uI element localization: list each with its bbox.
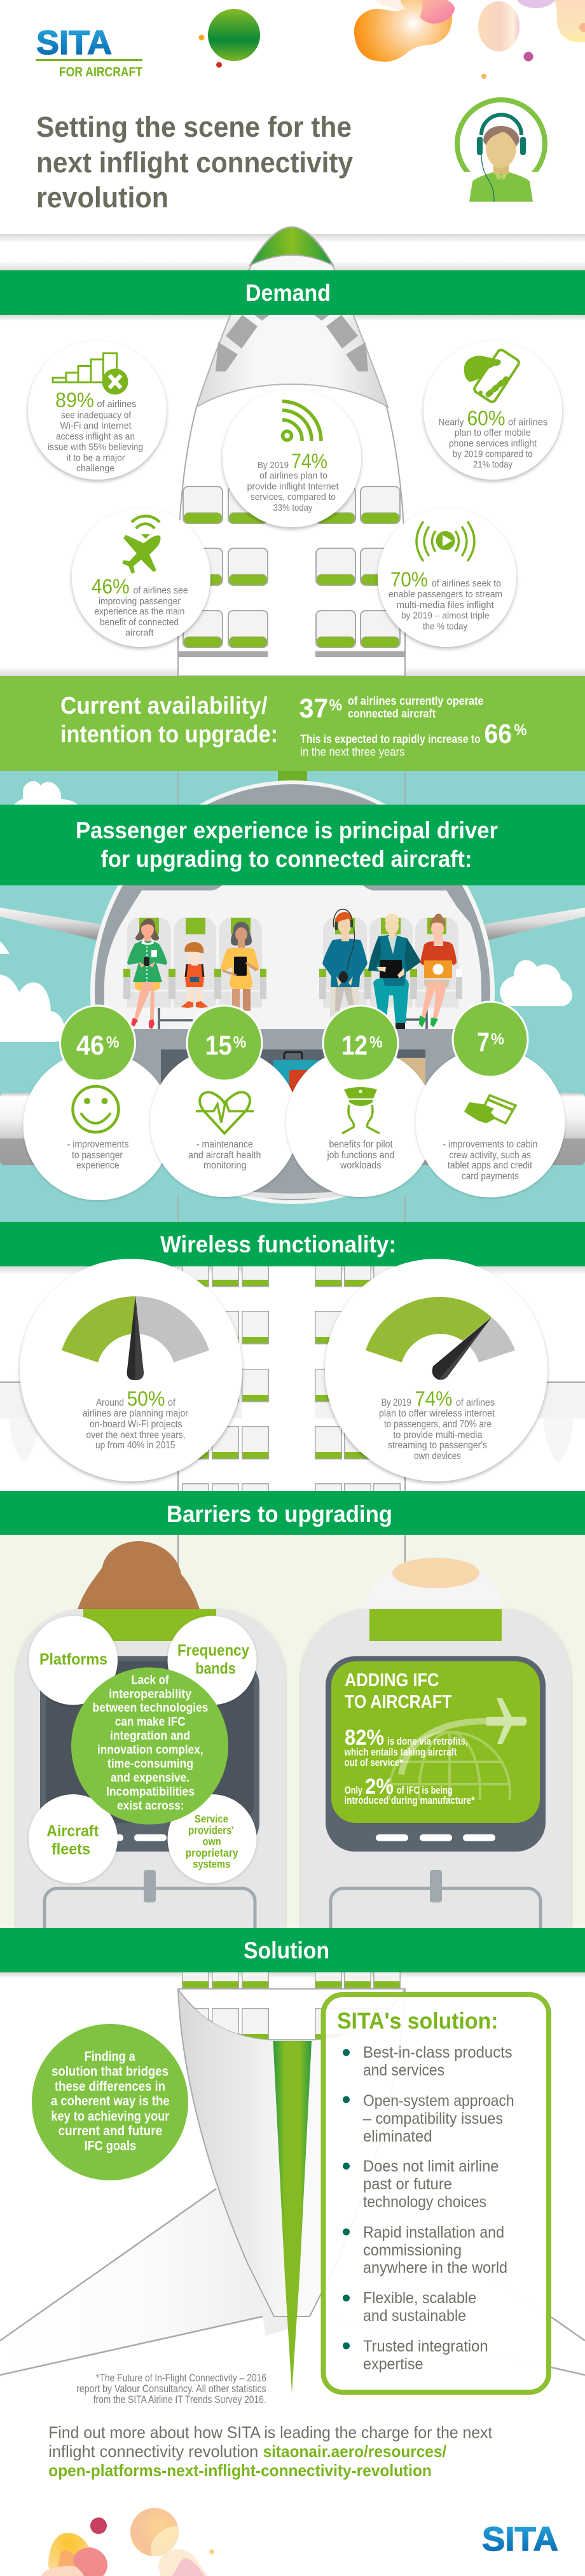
bullet: rapid installation: Rapid installation and bbox=[363, 2224, 504, 2241]
icon: pilot bbox=[342, 1087, 380, 1133]
icon: heart with pulse bbox=[196, 1092, 254, 1133]
stat circle: 60% mobile phone services bbox=[423, 341, 562, 480]
bubble: aircraft fleets bbox=[29, 1794, 118, 1883]
driver card: 46% passenger experience: experience bbox=[76, 1160, 120, 1171]
driver card: 7% cabin crew: card payments bbox=[462, 1171, 519, 1182]
call to action: open-platforms-next-inflight-connectivity-revolution bbox=[48, 2461, 432, 2480]
stat circle: 89% inadequate Wi-Fi: 89% bbox=[55, 389, 94, 412]
band: current availability: 37 bbox=[299, 693, 328, 724]
call to action: inflight connectivity revolution bbox=[48, 2442, 258, 2461]
gauge panel: 50% Wi-Fi projects bbox=[20, 1259, 242, 1481]
logo: SITA for aircraft bbox=[36, 24, 142, 80]
call to action: sitaonair.aero/resources/ bbox=[263, 2442, 446, 2461]
passenger head: brown hair bbox=[78, 1541, 200, 1609]
stat circle: 70% streaming: by 2019 – almost triple bbox=[401, 611, 490, 621]
fuselage ring bbox=[90, 780, 495, 1204]
passenger: woman in green bbox=[127, 918, 167, 1029]
driver card: 15% maintenance: 15 bbox=[205, 1030, 232, 1061]
tail fuselage bbox=[178, 1989, 405, 2316]
bubble: service providers: Service bbox=[195, 1813, 228, 1825]
gauge panel: 50% Wi-Fi projects: over the next three years, bbox=[86, 1430, 186, 1441]
right seat back with screen: introduced during manufacture* bbox=[345, 1795, 475, 1806]
driver card: 46% passenger experience: 46 bbox=[76, 1030, 104, 1061]
gauge panel: 50% Wi-Fi projects: on-board Wi-Fi projects bbox=[90, 1419, 182, 1430]
driver card: 7% cabin crew: crew activity, such as bbox=[449, 1150, 531, 1161]
stat circle: 89% inadequate Wi-Fi: see inadequacy of bbox=[61, 411, 132, 421]
green circle: finding a solution: solution that bridges bbox=[52, 2063, 169, 2079]
driver card: 7% cabin crew: 7 bbox=[477, 1027, 490, 1058]
green circle: finding a solution: IFC goals bbox=[85, 2138, 136, 2154]
right seat back with screen: out of service* bbox=[345, 1757, 403, 1768]
title: next inflight connectivity bbox=[36, 146, 353, 179]
centre circle: lack of interoperability: and expensive. bbox=[111, 1771, 189, 1785]
passenger: older man with tablet bbox=[368, 913, 421, 1029]
logo: SITA for aircraft: FOR AIRCRAFT bbox=[59, 65, 142, 80]
stat circle: 89% inadequate Wi-Fi: access inflight as an bbox=[56, 432, 135, 442]
green circle: finding a solution: these differences in bbox=[55, 2079, 165, 2094]
right seat back with screen: ADDING IFC bbox=[345, 1670, 439, 1691]
stat circle: 89% inadequate Wi-Fi: challenge bbox=[76, 464, 114, 474]
driver card: 12% pilot: 12 bbox=[341, 1030, 368, 1061]
bullet: open-system bbox=[343, 2092, 514, 2145]
gauge panel: 50% Wi-Fi projects: of bbox=[168, 1397, 176, 1408]
panel: SITA's solution: SITA's solution: bbox=[337, 2007, 499, 2034]
logo: SITA for aircraft: SITA bbox=[36, 24, 112, 62]
right seat back with screen: of IFC is being bbox=[397, 1785, 453, 1796]
bubble: frequency bands bbox=[168, 1616, 257, 1705]
title bbox=[36, 111, 353, 214]
band: current availability: connected aircraft bbox=[348, 707, 436, 720]
bubble: service providers: own bbox=[203, 1835, 221, 1848]
title: Setting the scene for the bbox=[36, 111, 352, 143]
stat circle: 60% mobile phone services: Nearly bbox=[439, 417, 464, 427]
driver card: 12% pilot bbox=[286, 1005, 435, 1197]
bullet: flexible: and sustainable bbox=[363, 2307, 466, 2325]
band: current availability: in the next three years bbox=[300, 745, 404, 758]
driver card: 15% maintenance: and aircraft health bbox=[188, 1150, 261, 1161]
bubble: platforms bbox=[29, 1616, 118, 1705]
logo: SITA footer: SITA bbox=[482, 2521, 558, 2558]
bubble: frequency bands: bands bbox=[195, 1660, 236, 1678]
green circle: finding a solution: key to achieving your bbox=[51, 2109, 170, 2124]
stat circle: 60% mobile phone services: 60% bbox=[467, 407, 505, 430]
driver card: 7% cabin crew: % bbox=[491, 1030, 504, 1048]
bullet: trusted bbox=[343, 2337, 488, 2373]
centre circle: lack of interoperability: time-consuming bbox=[107, 1757, 193, 1771]
driver card: 12% pilot: benefits for pilot bbox=[329, 1139, 393, 1150]
driver card: 46% passenger experience: - improvements bbox=[67, 1139, 129, 1150]
band: current availability bbox=[0, 676, 585, 771]
bubble: frequency bands: Frequency bbox=[177, 1642, 249, 1659]
driver card: 12% pilot: job functions and bbox=[327, 1150, 394, 1161]
call to action: Find out more about how SITA is leading the charge for the next bbox=[48, 2423, 493, 2442]
green circle: finding a solution: Finding a bbox=[85, 2049, 135, 2064]
bullet: best-in-class: and services bbox=[363, 2061, 444, 2079]
stat circle: 46% passenger experience: benefit of connected bbox=[100, 618, 179, 628]
passenger: child bbox=[181, 942, 208, 1008]
driver card: 15% maintenance: - maintenance bbox=[196, 1139, 253, 1150]
stat circle: 46% passenger experience: 46% bbox=[92, 575, 130, 598]
stat circle: 89% inadequate Wi-Fi: issue with 55% believing bbox=[48, 443, 143, 453]
gauge panel: 74% wireless internet: to passengers, and 70% are bbox=[384, 1419, 492, 1430]
passenger: man in blue with headphones bbox=[322, 910, 368, 1016]
cabin seats, demand section bbox=[178, 487, 405, 657]
stat circle: 70% streaming: enable passengers to stream bbox=[389, 590, 502, 600]
stat circle: 70% streaming: the % today bbox=[423, 622, 468, 632]
green circle: finding a solution: current and future bbox=[59, 2123, 162, 2138]
bubble: service providers bbox=[168, 1794, 257, 1883]
stat circle: 74% inflight internet bbox=[223, 389, 361, 527]
stat circle: 74% inflight internet: of airlines plan to bbox=[259, 471, 327, 481]
bullet: trusted: expertise bbox=[363, 2355, 423, 2373]
centre circle: lack of interoperability: Incompatibilities bbox=[106, 1785, 195, 1799]
centre circle: lack of interoperability: integration and bbox=[110, 1729, 190, 1743]
band: current availability: Current availability/ bbox=[60, 693, 268, 719]
right seat back with screen: which entails taking aircraft bbox=[344, 1747, 457, 1758]
band: passenger experience heading bbox=[0, 805, 585, 885]
band: current availability: intention to upgrade: bbox=[60, 721, 278, 748]
driver card: 7% cabin crew: tablet apps and credit bbox=[448, 1160, 533, 1171]
green circle: finding a solution bbox=[32, 2024, 188, 2180]
right seat back with screen: 2% bbox=[365, 1775, 394, 1799]
stat circle: 60% mobile phone services: by 2019 compared to bbox=[453, 449, 533, 459]
gauge panel: 50% Wi-Fi projects: 50% bbox=[127, 1387, 165, 1410]
stat circle: 60% mobile phone services: of airlines bbox=[508, 417, 547, 427]
footnote: from the SITA Airline IT Trends Survey 2016. bbox=[93, 2393, 266, 2406]
stat circle: 74% inflight internet: By 2019 bbox=[258, 460, 289, 471]
bullet: open-system: eliminated bbox=[363, 2128, 432, 2145]
band: current availability: of airlines currently operate bbox=[348, 694, 483, 707]
panel: SITA's solution bbox=[323, 1995, 549, 2392]
driver card: 7% cabin crew bbox=[416, 1001, 565, 1197]
band: barriers heading: Barriers to upgrading bbox=[167, 1501, 392, 1527]
stat circle: 89% inadequate Wi-Fi: Wi-Fi and Internet bbox=[60, 421, 131, 431]
right seat back with screen: TO AIRCRAFT bbox=[345, 1692, 452, 1712]
footnote: report by Valour Consultancy. All other statistics bbox=[76, 2383, 266, 2395]
bullet: flexible: Flexible, scalable bbox=[363, 2289, 476, 2307]
icon: passenger with headphones bbox=[457, 100, 545, 204]
band: demand heading: Demand bbox=[245, 280, 331, 306]
band: wireless functionality bbox=[0, 1222, 585, 1266]
footnote: *The Future of In-Flight Connectivity – 2016 bbox=[96, 2372, 266, 2384]
section background: wireless bbox=[0, 1266, 585, 1491]
band: passenger experience heading: for upgrading to connected aircraft: bbox=[100, 846, 472, 872]
band: current availability: This is expected to rapidly increase to bbox=[300, 732, 481, 745]
driver card: 46% passenger experience bbox=[23, 1005, 172, 1200]
footnote bbox=[76, 2372, 266, 2406]
clouds bbox=[0, 781, 572, 1042]
centre circle: lack of interoperability: can make IFC bbox=[115, 1715, 186, 1729]
passengers bbox=[123, 910, 462, 1029]
bullet: does not limit: Does not limit airline bbox=[363, 2157, 499, 2175]
centre circle: lack of interoperability: innovation complex, bbox=[97, 1743, 203, 1757]
stat circle: 89% inadequate Wi-Fi: of airlines bbox=[97, 399, 136, 410]
stat circle: 46% passenger experience: improving passenger bbox=[99, 597, 181, 607]
driver card: 46% passenger experience: % bbox=[106, 1034, 120, 1051]
stat circle: 89% inadequate Wi-Fi: it to be a major bbox=[66, 453, 125, 463]
seats bbox=[123, 917, 462, 1029]
stat circle: 60% mobile phone services: phone services inflight bbox=[449, 439, 537, 449]
right seat back with screen bbox=[301, 1558, 571, 1939]
icon: hand holding phone bbox=[464, 349, 520, 403]
gauge panel: 74% wireless internet: to provide multi-media bbox=[393, 1430, 483, 1441]
engines band bbox=[0, 1093, 585, 1165]
bullet: best-in-class: Best-in-class products bbox=[363, 2044, 513, 2061]
gauge panel: 74% wireless internet: streaming to passenger's bbox=[388, 1440, 487, 1451]
stat circle: 60% mobile phone services: 21% today bbox=[473, 460, 513, 470]
band: current availability: % bbox=[329, 696, 342, 714]
centre circle: lack of interoperability bbox=[71, 1668, 228, 1824]
title: revolution bbox=[36, 181, 169, 214]
plane fuselage and cockpit bbox=[178, 227, 405, 676]
stat circle: 46% passenger experience bbox=[72, 508, 210, 647]
stat circle: 70% streaming: multi-media files inflight bbox=[397, 600, 494, 611]
bullet: open-system: – compatibility issues bbox=[363, 2110, 503, 2128]
stat circle: 74% inflight internet: provide inflight Internet bbox=[247, 482, 338, 492]
driver card: 15% maintenance bbox=[150, 1005, 299, 1197]
icon: smiley bbox=[72, 1086, 118, 1132]
footer bubbles bbox=[41, 2508, 214, 2576]
gauge panel: 74% wireless internet bbox=[325, 1259, 547, 1481]
bullet: flexible bbox=[343, 2289, 476, 2325]
seats bbox=[182, 1972, 401, 2039]
call to action bbox=[48, 2423, 493, 2480]
bullet: does not limit: past or future bbox=[363, 2175, 452, 2193]
driver card: 46% passenger experience: to passenger bbox=[72, 1150, 123, 1161]
right seat back with screen: 82% bbox=[345, 1726, 384, 1750]
centre circle: lack of interoperability: Lack of bbox=[131, 1674, 169, 1687]
stat circle: 70% streaming: 70% bbox=[390, 568, 428, 591]
passenger: woman in red with laptop bbox=[419, 913, 457, 1027]
icon: globe and plane watermark bbox=[388, 1698, 526, 1800]
gauge: 74 percent bbox=[366, 1297, 515, 1380]
centre circle: lack of interoperability: exist across: bbox=[117, 1799, 184, 1813]
bullet: trusted: Trusted integration bbox=[363, 2337, 488, 2355]
gauge panel: 74% wireless internet: of airlines bbox=[456, 1397, 495, 1408]
bubble: service providers: systems bbox=[193, 1857, 231, 1870]
right seat back with screen: Only bbox=[345, 1785, 363, 1796]
stat circle: 74% inflight internet: 74% bbox=[291, 450, 327, 473]
passenger: woman in yellow bbox=[221, 922, 259, 1011]
luggage hold bbox=[161, 1049, 425, 1093]
section background: solution with aircraft tail bbox=[0, 1956, 585, 2418]
centre circle: lack of interoperability: between technologies bbox=[93, 1701, 209, 1715]
centre circle: lack of interoperability: interoperability bbox=[109, 1688, 192, 1701]
section background: barriers bbox=[0, 1535, 585, 1928]
bullet: rapid installation bbox=[343, 2224, 507, 2277]
gauge panel: 74% wireless internet: 74% bbox=[415, 1387, 452, 1410]
gauge panel: 74% wireless internet: By 2019 bbox=[382, 1397, 411, 1408]
bullet: does not limit: technology choices bbox=[363, 2193, 486, 2211]
stat circle: 74% inflight internet: 33% today bbox=[273, 503, 313, 513]
passenger head: balding bbox=[365, 1558, 504, 1609]
bullet: best-in-class bbox=[343, 2044, 513, 2079]
band: wireless functionality: Wireless functionality: bbox=[160, 1231, 396, 1257]
cabin seats, wireless section bbox=[182, 1254, 400, 1516]
stat circle: 89% inadequate Wi-Fi bbox=[28, 341, 167, 480]
green circle: finding a solution: a coherent way is the bbox=[51, 2093, 170, 2109]
stat circle: 70% streaming bbox=[378, 508, 516, 647]
bullet: rapid installation: anywhere in the world bbox=[363, 2259, 507, 2277]
stat circle: 46% passenger experience: experience as the main bbox=[94, 607, 184, 617]
band: passenger experience heading: Passenger experience is principal driver bbox=[76, 817, 498, 843]
stat circle: 46% passenger experience: aircraft bbox=[125, 628, 154, 639]
band: demand heading bbox=[0, 270, 585, 315]
stat circle: 46% passenger experience: of airlines see bbox=[134, 586, 188, 596]
band: current availability: % bbox=[514, 721, 526, 739]
icon: plane with wifi bbox=[122, 516, 161, 574]
icon: wifi signal bbox=[282, 401, 321, 441]
driver card: 12% pilot: % bbox=[369, 1034, 383, 1051]
band: barriers heading bbox=[0, 1491, 585, 1535]
gauge panel: 50% Wi-Fi projects: airlines are planning major bbox=[83, 1408, 188, 1419]
driver card: 15% maintenance: % bbox=[233, 1034, 246, 1051]
stat circle: 70% streaming: of airlines seek to bbox=[432, 579, 501, 589]
gauge panel: 50% Wi-Fi projects: up from 40% in 2015 bbox=[95, 1440, 176, 1451]
bullet: does not limit bbox=[343, 2157, 499, 2211]
driver card: 7% cabin crew: - improvements to cabin bbox=[443, 1139, 537, 1150]
band: solution heading bbox=[0, 1928, 585, 1972]
bullet: rapid installation: commissioning bbox=[363, 2241, 462, 2259]
gauge panel: 50% Wi-Fi projects: Around bbox=[96, 1397, 124, 1408]
gauge: 50 percent bbox=[62, 1296, 209, 1380]
tail fin bbox=[273, 2041, 312, 2393]
right seat back with screen: is done via retrofits, bbox=[387, 1736, 468, 1747]
bubble: aircraft fleets: Aircraft bbox=[46, 1822, 99, 1840]
gauge panel: 74% wireless internet: plan to offer wireless internet bbox=[379, 1408, 495, 1419]
left seat back with screen bbox=[16, 1541, 286, 1939]
section background: demand bbox=[0, 234, 585, 676]
icon: streaming play bbox=[416, 522, 474, 560]
stat circle: 74% inflight internet: services, compared to bbox=[251, 492, 336, 502]
band: current availability: 66 bbox=[485, 719, 512, 749]
header: decorative bubbles bbox=[198, 0, 585, 79]
bubble: platforms: Platforms bbox=[39, 1651, 107, 1668]
bullet: open-system: Open-system approach bbox=[363, 2092, 514, 2110]
driver card: 12% pilot: workloads bbox=[340, 1160, 382, 1171]
stat circle: 60% mobile phone services: plan to offer mobile bbox=[455, 428, 531, 438]
icon: hand and card bbox=[464, 1095, 516, 1123]
bubble: aircraft fleets: fleets bbox=[52, 1841, 90, 1859]
gauge panel: 74% wireless internet: own devices bbox=[414, 1451, 461, 1462]
bubble: service providers: providers' bbox=[188, 1824, 234, 1837]
driver card: 15% maintenance: monitoring bbox=[203, 1160, 247, 1171]
band: solution heading: Solution bbox=[244, 1937, 329, 1963]
sky background with aircraft front view bbox=[0, 771, 585, 1222]
tail wings bbox=[0, 2189, 292, 2375]
icon: weak signal bars with cross bbox=[53, 354, 128, 394]
upper wings bbox=[0, 908, 585, 940]
bubble: service providers: proprietary bbox=[186, 1846, 238, 1859]
